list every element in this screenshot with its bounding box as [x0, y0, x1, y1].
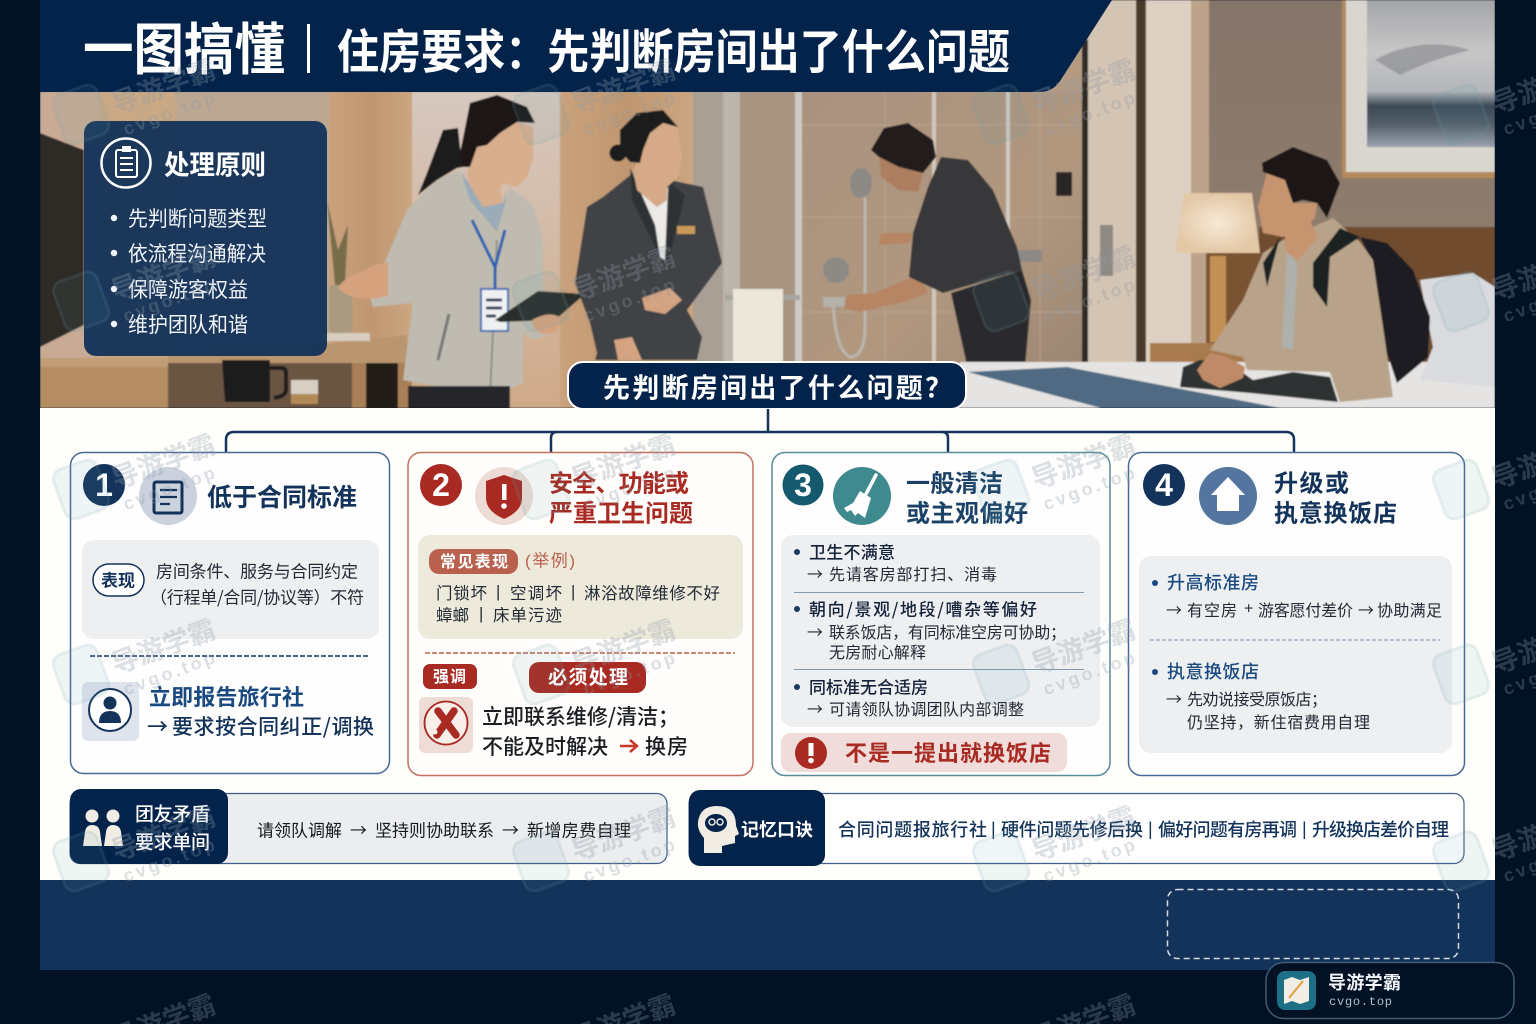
watermark grid: 导游学霸 [565, 423, 680, 497]
heading [1274, 464, 1397, 528]
kettle [222, 360, 286, 402]
brand badge: 导游学霸 [1328, 969, 1401, 995]
common symptoms box: 淋浴故障维修不好 [584, 580, 720, 604]
watermark grid: cvgo.top [120, 462, 220, 514]
strip: memory mnemonic: | [1148, 819, 1153, 839]
desk and shelf [40, 335, 412, 408]
details box: + [1244, 600, 1253, 618]
details box: → [807, 561, 823, 585]
badge 3 [782, 464, 824, 506]
watermark grid: cvgo.top [120, 274, 220, 326]
details box: 游客愿付差价 [1258, 597, 1353, 621]
strip: memory mnemonic: 升级换店差价自理 [1312, 816, 1449, 842]
badge 2: 2 [432, 467, 450, 503]
watermark grid: 导游学霸 [105, 235, 220, 309]
action text: 立即联系维修/清洁； [482, 701, 679, 731]
watermark grid: 导游学霸 [1025, 608, 1140, 682]
panel: handling principles [84, 121, 327, 356]
card 2: safety and hygiene [408, 452, 753, 776]
strip: team conflict: 团友矛盾 [135, 800, 210, 826]
nightstand and lamp [1150, 193, 1260, 363]
watermark grid: 导游学霸 [1025, 423, 1140, 497]
symptoms box [82, 540, 379, 639]
details box: 执意换饭店 [1167, 658, 1259, 684]
badge 1 [83, 464, 125, 506]
shower fixtures [823, 168, 1042, 357]
footer band [40, 880, 1495, 970]
strip: memory mnemonic: 记忆口诀 [741, 816, 813, 842]
bullet list: 保障游客权益 [128, 274, 248, 304]
badge 4 [1143, 464, 1185, 506]
question pill: 先判断房间出了什么问题？ [603, 366, 952, 406]
heading: 低于合同标准 [207, 478, 357, 514]
brand badge [1266, 962, 1514, 1018]
connector lines [226, 409, 1294, 452]
icon: tools [419, 697, 473, 753]
symptoms box: 表现 [101, 566, 135, 592]
dashed placeholder box [1168, 890, 1458, 958]
icon: head with brain [698, 806, 739, 853]
strip: memory mnemonic: 偏好问题有房再调 [1158, 816, 1297, 842]
emphasis tags: 必须处理 [548, 662, 628, 690]
details box: 有空房 [1187, 597, 1237, 621]
title [83, 6, 1010, 86]
strip: memory mnemonic: 硬件问题先修后换 [1001, 816, 1143, 842]
badge 4: 4 [1155, 467, 1173, 503]
details box: 无房耐心解释 [829, 639, 926, 663]
details box: 先请客房部打扫、消毒 [829, 561, 997, 585]
icon: two people [83, 810, 123, 846]
details box: → [807, 696, 823, 720]
details box: → [807, 619, 823, 643]
card 3: general cleaning or preference [772, 452, 1110, 776]
warning callout: 不是一提出就换饭店 [845, 736, 1051, 768]
content background [40, 408, 1495, 880]
details box: 可请领队协调团队内部调整 [829, 696, 1024, 720]
strip: team conflict: → [350, 816, 367, 842]
watermark grid: 导游学霸 [565, 608, 680, 682]
emphasis tags: 强调 [433, 663, 466, 687]
watermark grid: cvgo.top [580, 834, 680, 886]
icon: document [139, 467, 197, 525]
strip: team conflict: 要求单间 [135, 828, 210, 854]
strip: team conflict: 坚持则协助联系 [375, 816, 494, 842]
heading: 升级或 [1274, 464, 1349, 498]
strip: memory mnemonic: | [1302, 819, 1307, 839]
icon: up arrow [1199, 467, 1257, 525]
seated guest [1180, 147, 1430, 402]
details box: 升高标准房 [1167, 569, 1259, 595]
emphasis tags [423, 662, 646, 693]
brand badge: cvgo.top [1329, 995, 1392, 1009]
common symptoms box: 空调坏 [510, 580, 562, 604]
badge 3: 3 [794, 467, 812, 503]
headboard [1259, 227, 1495, 367]
strip: team conflict: 请领队调解 [257, 816, 342, 842]
watermark grid: 导游学霸 [1025, 795, 1140, 869]
plant and vase [320, 200, 370, 341]
towel and rail [725, 289, 800, 362]
watermark grid: cvgo.top [120, 834, 220, 886]
watermark grid: cvgo.top [580, 647, 680, 699]
details box [781, 535, 1100, 727]
cup [291, 380, 318, 404]
guide woman [338, 95, 585, 408]
strip: team conflict: 新增房费自理 [527, 816, 631, 842]
common symptoms box: 门锁坏 [436, 580, 488, 604]
arrow [620, 740, 637, 752]
watermark grid: cvgo.top [580, 274, 680, 326]
card 1: below contract standard: 要求按合同纠正/调换 [172, 711, 374, 741]
watermark grid: 导游学霸 [105, 795, 220, 869]
icon: person [82, 682, 139, 741]
common symptoms box: 常见表现 [440, 548, 508, 572]
title: 住房要求：先判断房间出了什么问题 [337, 14, 1010, 82]
pillows [1420, 273, 1495, 387]
common symptoms box: 床单污迹 [493, 602, 562, 626]
common symptoms box: | [571, 583, 575, 601]
bullet list: 依流程沟通解决 [128, 238, 266, 268]
details box: 协助满足 [1377, 597, 1442, 621]
heading [549, 464, 693, 528]
card 1: below contract standard: → [147, 711, 168, 741]
heading: 严重卫生问题 [549, 494, 693, 528]
bullet list: 先判断问题类型 [128, 203, 267, 233]
symptoms box: （行程单/合同/协议等）不符 [150, 584, 364, 608]
watermark grid: 导游学霸 [1025, 235, 1140, 309]
details box: 联系饭店，有同标准空房可协助； [829, 619, 1066, 643]
card 2: safety and hygiene: 换房 [645, 731, 688, 761]
watermark grid: cvgo.top [1040, 87, 1140, 139]
badge 1: 1 [95, 467, 113, 503]
watermark grid: cvgo.top [1040, 647, 1140, 699]
icon: clipboard [102, 138, 150, 188]
heading: 或主观偏好 [906, 494, 1028, 528]
details box [1139, 556, 1452, 753]
watermark grid: 导游学霸 [105, 48, 220, 122]
card 4: upgrade or change hotel [1128, 452, 1464, 776]
watermark grid: cvgo.top [120, 87, 220, 139]
common symptoms box: 蟑螂 [436, 602, 469, 626]
technician [844, 123, 1031, 370]
icon: shield [475, 467, 533, 525]
title: 一图搞懂 [83, 6, 285, 86]
action text: 立即报告旅行社 [149, 680, 304, 712]
card 2: safety and hygiene: 不能及时解决 [482, 731, 608, 761]
watermark grid: 导游学霸 [1025, 48, 1140, 122]
heading: 处理原则 [164, 144, 266, 182]
watermark grid: 导游学霸 [105, 608, 220, 682]
bullet list: 维护团队和谐 [128, 309, 248, 339]
strip: memory mnemonic: | [991, 819, 996, 839]
strip: team conflict [70, 789, 667, 864]
strip: memory mnemonic [689, 790, 1464, 866]
details box: 朝向/景观/地段/嘈杂等偏好 [809, 596, 1037, 620]
hotel staff woman [575, 110, 722, 360]
watermark grid: cvgo.top [1040, 834, 1140, 886]
watermark grid: cvgo.top [120, 647, 220, 699]
details box: 卫生不满意 [809, 538, 895, 564]
warning callout [781, 733, 1067, 772]
heading [906, 464, 1028, 528]
common symptoms box: | [479, 605, 483, 623]
bullet list [111, 203, 267, 339]
common symptoms box: (举例) [525, 552, 575, 570]
watermark grid: 导游学霸 [565, 795, 680, 869]
watermark grid: cvgo.top [580, 462, 680, 514]
icon: broom [833, 467, 891, 525]
bed [960, 362, 1495, 408]
watermark grid: 导游学霸 [565, 235, 680, 309]
watermark grid: cvgo.top [1040, 462, 1140, 514]
strip: team conflict: → [502, 816, 519, 842]
card 1: below contract standard [70, 452, 390, 774]
wall art [1342, 0, 1495, 178]
heading: 安全、功能或 [549, 464, 689, 498]
strip: memory mnemonic: 合同问题报旅行社 [838, 816, 987, 842]
photo: hotel room scene [40, 0, 1495, 408]
heading: 执意换饭店 [1274, 494, 1397, 528]
common symptoms box [418, 535, 743, 639]
details box: → [1166, 686, 1182, 710]
heading: 一般清洁 [906, 464, 1003, 498]
badge 2 [420, 464, 462, 506]
common symptoms box: | [496, 583, 500, 601]
icon: map logo [1277, 971, 1316, 1010]
watermark grid: 导游学霸 [105, 423, 220, 497]
header banner [40, 0, 1112, 92]
watermark grid: 导游学霸 [565, 48, 680, 122]
details box: 仍坚持，新住宿费用自理 [1187, 709, 1370, 733]
details box: 同标准无合适房 [809, 674, 928, 698]
symptoms box: 房间条件、服务与合同约定 [156, 558, 358, 582]
details box: → [1358, 597, 1374, 621]
watermark grid: cvgo.top [1040, 274, 1140, 326]
TV [40, 133, 84, 347]
details box: 先劝说接受原饭店； [1187, 686, 1327, 710]
watermark grid: cvgo.top [580, 87, 680, 139]
details box: → [1166, 597, 1182, 621]
